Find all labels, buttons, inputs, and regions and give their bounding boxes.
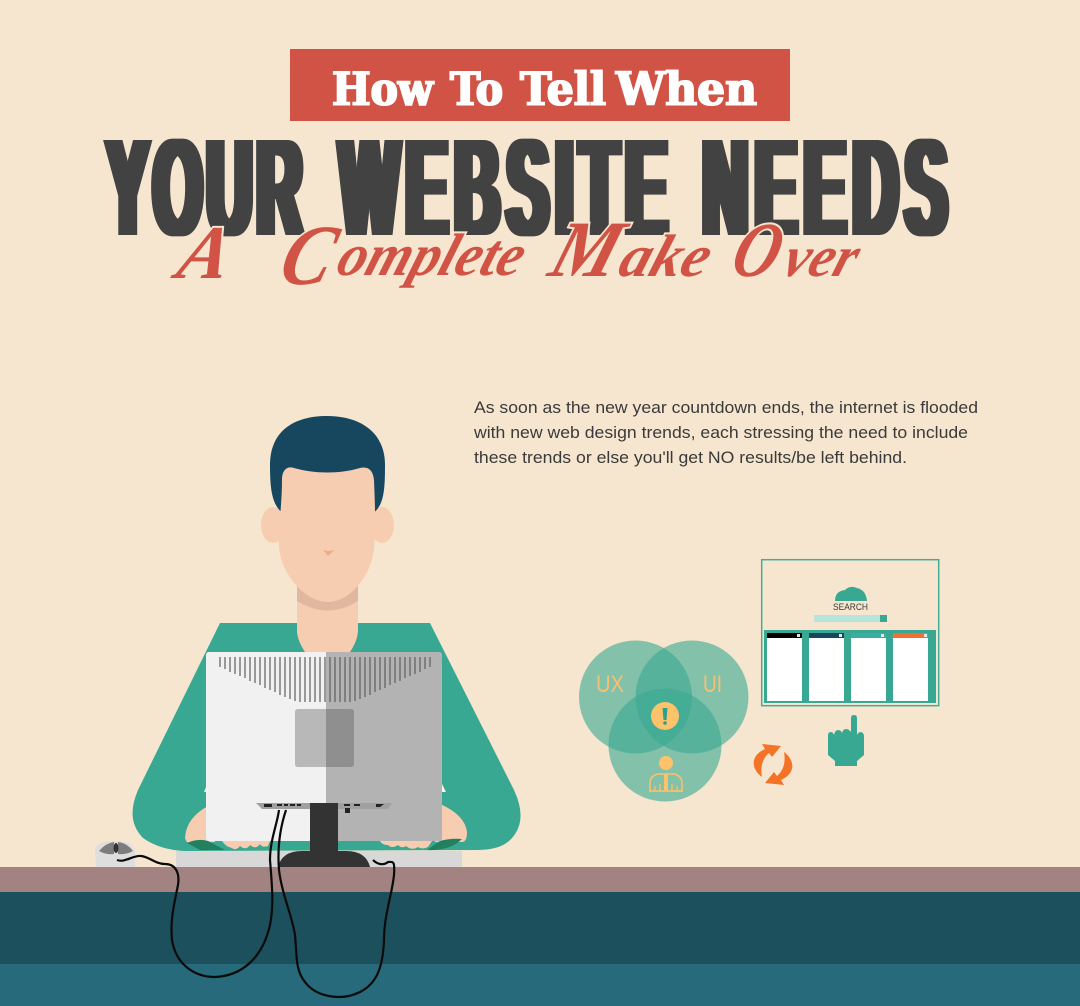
torso and arms: [133, 623, 521, 851]
label UI: UI: [703, 671, 722, 698]
search label: SEARCH: [833, 602, 868, 612]
heading: A Complete Make Over: ver: [776, 224, 870, 289]
column headers: [767, 633, 928, 638]
heading: A Complete Make Over: M: [538, 205, 638, 294]
mount plate: [295, 709, 326, 767]
intro paragraph: As soon as the new year countdown ends, the internet is flooded: [474, 399, 978, 417]
heading: Your Website Needs: WEBSITE: [340, 110, 667, 265]
mouth: [323, 550, 334, 556]
heading: A Complete Make Over: ake: [612, 223, 721, 290]
title banner: How To Tell When: How: [332, 62, 434, 116]
intro paragraph: these trends or else you'll get NO results/be left behind.: [474, 449, 907, 467]
content columns: [767, 633, 928, 701]
vent slats: [220, 657, 430, 702]
heading: A Complete Make Over: [164, 205, 870, 303]
search bar: [814, 615, 880, 622]
face: [279, 467, 375, 602]
stand base: [278, 851, 370, 867]
neck: [297, 585, 358, 652]
cables: [117, 810, 394, 997]
desk: [0, 867, 1080, 1006]
hair: [270, 416, 385, 514]
title banner: How To Tell When: Tell: [520, 62, 606, 116]
content tray: [764, 630, 936, 703]
heading: A Complete Make Over: C: [271, 208, 349, 303]
title banner: How To Tell When: When: [615, 62, 757, 116]
mouse: [95, 841, 135, 867]
shirt details: [204, 782, 446, 792]
monitor back: [206, 652, 442, 867]
website wireframe: [762, 560, 939, 706]
icon: exclamation badge: [651, 702, 679, 730]
label UX: UX: [596, 671, 624, 698]
heading: A Complete Make Over: omplete: [330, 222, 535, 289]
icon: pointing hand: [828, 715, 864, 766]
neck shadow: [297, 585, 358, 610]
heading: Your Website Needs: NEEDS: [703, 110, 947, 265]
heading: Your Website Needs: [107, 110, 947, 265]
left fingers: [222, 841, 270, 849]
monitor left half: [206, 652, 326, 841]
heading: Your Website Needs: YOUR: [107, 110, 302, 265]
icon: user: [649, 756, 683, 791]
left hand: [185, 806, 215, 843]
intro paragraph: with new web design trends, each stressing the need to include: [473, 424, 968, 442]
port strip: [256, 803, 392, 813]
heading: A Complete Make Over: A: [164, 210, 243, 295]
right hand: [435, 804, 467, 842]
intro paragraph: [473, 399, 978, 467]
right fingers: [380, 841, 432, 849]
keyboard: [176, 851, 462, 867]
heading: A Complete Make Over: O: [723, 207, 794, 294]
icon: refresh arrows: [754, 744, 792, 785]
stand: [310, 803, 338, 853]
title banner: How To Tell When: [290, 49, 790, 121]
cuffs: [187, 839, 462, 850]
title banner: How To Tell When: To: [450, 62, 503, 116]
monitor right half: [326, 652, 442, 841]
venn diagram: UX, UI, user: [579, 640, 748, 802]
cloud logo: [835, 587, 867, 601]
person at the computer: [133, 416, 521, 851]
ears: [261, 507, 394, 543]
